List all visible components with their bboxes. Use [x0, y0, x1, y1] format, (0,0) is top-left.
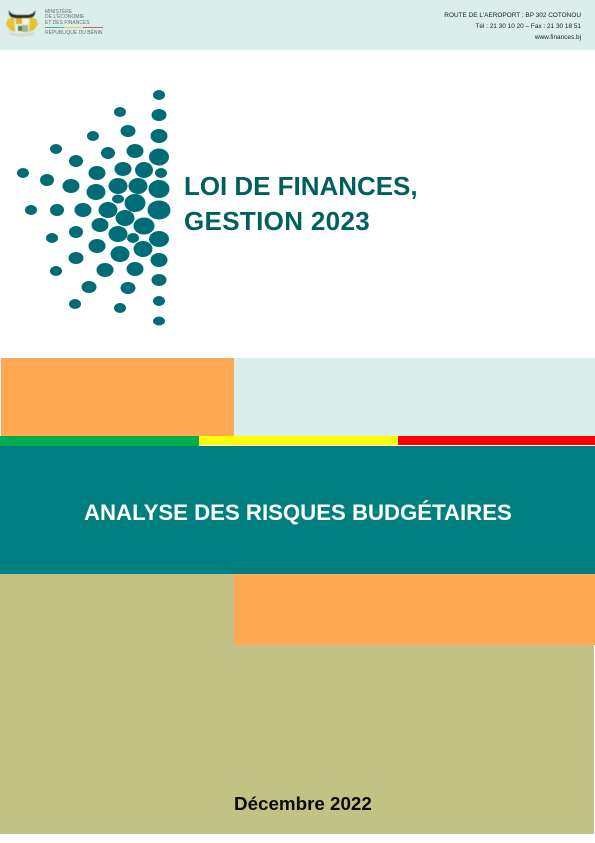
title: LOI DE FINANCES, [184, 171, 418, 201]
ministry name: RÉPUBLIQUE DU BÉNIN [45, 30, 103, 36]
logo: dot cluster [17, 90, 170, 326]
contact details: www.finances.bj [535, 34, 581, 41]
olive panel [0, 574, 594, 834]
ministry name: MINISTÈRE [45, 8, 72, 14]
date: Décembre 2022 [234, 793, 372, 814]
flag stripe [0, 436, 595, 446]
orange panel top [1, 358, 234, 436]
contact details [444, 12, 581, 41]
title: GESTION 2023 [184, 206, 370, 236]
ministry name [45, 8, 103, 36]
contact details: Tél : 21 30 10 20 – Fax : 21 30 18 51 [475, 23, 581, 30]
teal banner [0, 446, 595, 574]
icon: coat of arms of Benin [5, 10, 39, 37]
title [184, 171, 418, 236]
orange panel bottom [234, 574, 595, 645]
header band [0, 0, 595, 50]
ministry name: ET DES FINANCES [45, 20, 90, 26]
light panel [234, 358, 595, 436]
banner heading: ANALYSE DES RISQUES BUDGÉTAIRES [84, 500, 512, 524]
contact details: ROUTE DE L'AEROPORT ; BP 302 COTONOU [444, 12, 581, 19]
ministry name: DE L'ÉCONOMIE [45, 14, 84, 20]
